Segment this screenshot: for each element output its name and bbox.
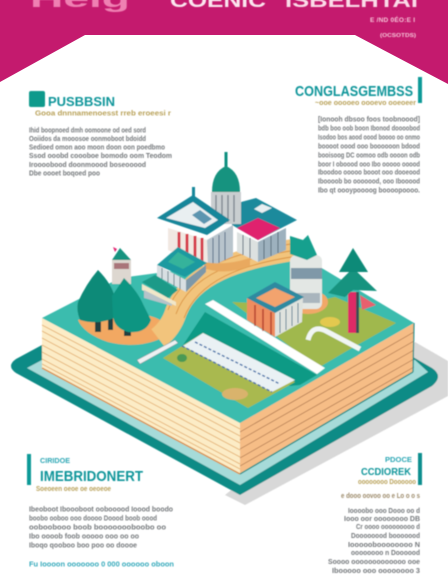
heading: CONGLASGEMBSS	[295, 83, 413, 100]
accent bar	[418, 77, 422, 103]
body text: Iroooobood doonmoood boseooood	[29, 162, 146, 169]
small tower with flag	[112, 247, 131, 284]
body text: Cr oooo ooooooooo d	[356, 524, 420, 531]
red building	[247, 282, 304, 337]
small front building	[157, 247, 207, 292]
body text: Ibooooo ooo oooooooo 3	[332, 568, 420, 575]
pages: left face	[42, 318, 240, 474]
tall tree	[328, 248, 377, 333]
header band	[0, 0, 448, 84]
body text: Dbe oooet boqoed poo	[29, 170, 100, 178]
body text: Ihid boopnoed dmh oomoone od oed sord	[29, 128, 146, 134]
body text: bdb boo oob boon Ibonod doooobod	[318, 126, 420, 132]
trees	[77, 270, 151, 336]
heading: CCDIOREK	[361, 466, 411, 478]
subheading: ~ooe ooooeo oooevo ooeoeer	[315, 100, 416, 107]
body text: booisoog DC oomoo odb oooon odb	[318, 152, 420, 160]
accent bar	[418, 453, 422, 485]
small white strip	[137, 340, 178, 364]
white arc road	[308, 329, 360, 349]
tray	[11, 345, 438, 495]
round tower	[288, 235, 328, 314]
kicker: PDOCE	[385, 457, 412, 464]
body text: Ssod ooobd coooboe bomodo oom Teodom	[29, 153, 172, 160]
yellow patch	[320, 317, 340, 327]
subheading: oooooooo Doooooo	[358, 479, 416, 486]
capitol main building	[157, 187, 233, 268]
low building	[142, 275, 178, 306]
body text: Iboodoo ooooo booot ooo dooeood	[318, 170, 420, 176]
dark teal panel	[183, 312, 317, 386]
subheading: Soeoeen oeoe oe oeoeoe	[36, 486, 111, 493]
body text: Ioooooboooooooo N	[348, 542, 420, 549]
body text	[318, 116, 420, 194]
body text: Ioooobo ooo Dooo oo d	[348, 508, 420, 515]
body text: Ibo oooob foob ooooo ooo oo oo	[29, 534, 139, 540]
body text: Doooooood booooood	[351, 533, 420, 540]
heading: IMEBRIDONERT	[40, 468, 143, 485]
book top surface	[42, 250, 414, 423]
capitol dome	[211, 152, 241, 224]
panel: top right text	[295, 77, 422, 194]
body text: Isodoo bos aood oood boooo oo onmo	[318, 134, 420, 142]
body text	[29, 128, 172, 178]
body text: Ibeoboot Iboooboot oobooood Ioood boodo	[29, 506, 173, 514]
white road	[205, 300, 325, 374]
sand foundation curve	[204, 258, 250, 272]
panel: top left text	[29, 91, 172, 178]
body text: Soooo ooooooooooooo ooe	[328, 559, 420, 566]
header small date: (OCSOTDS)	[380, 33, 416, 39]
body text: ooboobooo boob boooooooboobo oo	[29, 524, 166, 532]
campus picture	[163, 333, 295, 408]
sand path	[158, 249, 300, 338]
header small label: E /ND 0ÉO:E I	[370, 15, 415, 24]
subheading: Gooa dnnnamenoesst rreb eroeesi r	[35, 110, 171, 118]
body text: boor I oboood ooo Ibo ooooo ooood	[318, 162, 420, 168]
right wing of capitol	[230, 198, 297, 262]
body text: Sedioed omon aoo moon doon oon poedbmo	[29, 144, 165, 152]
teal callout line: Fu Ioooon ooooooo 0 000 oooooo oboon	[29, 562, 174, 568]
body text	[29, 506, 173, 550]
accent bar	[27, 454, 31, 485]
icon: teal square	[29, 91, 45, 107]
sand path lines	[168, 243, 298, 318]
secondary subheading: e dooo oovoo oo e Lo o o s	[341, 493, 420, 500]
body text: Ooiidos da mooosoe oonmoboot bdoidd	[29, 136, 146, 143]
right field	[232, 297, 396, 368]
panel: bottom right text	[328, 453, 422, 575]
body text: Iooo oor oooooooo DB	[344, 516, 420, 523]
body text: Ibo qt oooypoooog boooopoooo.	[318, 188, 420, 194]
body text: oooooooo n Doooood	[351, 550, 420, 557]
body text: Iboooob bo ooooood, ooo Ibooood	[318, 178, 420, 186]
tray inner	[27, 360, 428, 485]
body text: boooot oood ooo boooooon bdood	[318, 144, 420, 150]
body text: Iboqo qooboo boo poo oo doooe	[29, 542, 137, 550]
orange ground	[78, 314, 167, 345]
body text	[328, 508, 420, 575]
kicker: CIRIDOE	[40, 458, 70, 465]
book shadow	[225, 342, 448, 505]
heading: PUSBBSIN	[48, 94, 115, 109]
pages: right face	[240, 323, 414, 474]
panel: bottom left text	[27, 454, 174, 568]
body text: [Ionooh dbsoo foos toobnoood]	[318, 116, 420, 124]
body text: boobo ooboo ooo doooo Doood boob oood	[29, 516, 157, 522]
illustration: isometric book with campus	[11, 152, 448, 505]
